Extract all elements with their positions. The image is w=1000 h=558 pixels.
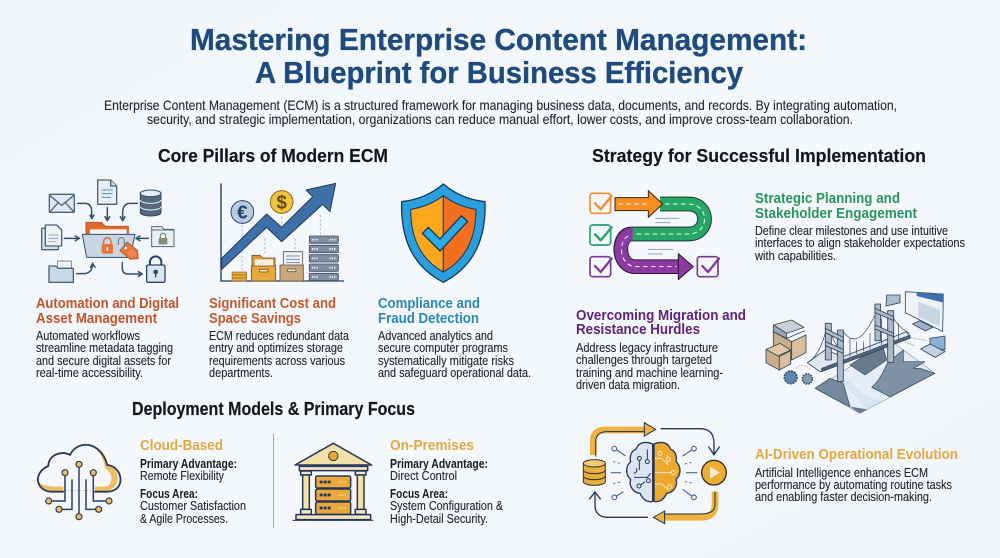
grey folder <box>152 227 174 247</box>
panel: cloud-based: Primary Advantage: <box>140 457 237 471</box>
euro coin: € <box>237 202 248 223</box>
heading and text: strategic planning: Define clear milestones and use intuitive <box>755 224 948 238</box>
heading and text: automation <box>36 295 179 380</box>
orange arrow <box>615 191 663 217</box>
intro text <box>104 98 897 127</box>
title: A Blueprint for Business Efficiency <box>255 55 744 90</box>
heading and text: AI-driven evolution: performance by automating routine tasks <box>755 478 952 492</box>
brain <box>627 442 680 502</box>
panel: cloud-based: Remote Flexibility <box>140 469 225 483</box>
heading and text: cost savings: Space Savings <box>209 310 301 327</box>
loop arrows <box>589 423 720 524</box>
document stack <box>42 225 62 250</box>
heading and text: automation: and secure digital assets for <box>36 354 171 368</box>
icon: shield <box>402 184 485 282</box>
heading and text: compliance: and safeguard operational data. <box>378 366 531 380</box>
panel: on-premises <box>390 437 504 526</box>
panel: on-premises: Focus Area: <box>390 487 448 501</box>
rising arrow <box>222 183 336 269</box>
heading and text: cost savings: entry and optimizes storage <box>209 341 343 355</box>
heading and text: strategic planning: interfaces to align stakeholder expectations <box>755 236 965 250</box>
play button <box>702 460 726 485</box>
database <box>140 190 161 216</box>
heading and text: overcoming migration: Address legacy infrastructure <box>576 341 718 355</box>
heading and text: cost savings: ECM reduces redundant data <box>209 329 349 343</box>
heading: core pillars: Core Pillars of Modern ECM <box>158 146 388 166</box>
document <box>98 180 117 204</box>
boxes <box>766 320 806 370</box>
dollar coin: $ <box>276 192 287 213</box>
heading and text: overcoming migration: training and machine learning- <box>576 366 723 380</box>
icon: roadmap <box>590 191 719 280</box>
icon: AI operational loop <box>583 423 726 524</box>
heading and text: AI-driven evolution: AI-Driven Operational Evolution <box>755 446 958 463</box>
heading and text: overcoming migration: Overcoming Migration and <box>576 307 746 324</box>
rays <box>611 450 697 496</box>
panel: on-premises: Direct Control <box>390 469 457 483</box>
heading and text: overcoming migration: challenges through targeted <box>576 353 712 367</box>
intro text: Enterprise Content Management (ECM) is a structured framework for managing business data, documents, and records. By integrating automation, <box>104 98 897 113</box>
icon: automation and digital assets <box>42 180 174 282</box>
green road <box>632 204 705 234</box>
heading and text: overcoming migration <box>576 307 746 392</box>
padlock <box>147 256 165 282</box>
gold box <box>251 255 276 281</box>
dashed guides <box>242 215 320 270</box>
heading and text: cost savings <box>209 295 349 380</box>
title <box>190 22 807 90</box>
heading and text: automation: real-time accessibility. <box>36 366 143 380</box>
heading and text: strategic planning: Strategic Planning and <box>755 190 900 207</box>
towers <box>825 304 894 382</box>
heading: strategy: Strategy for Successful Implementation <box>592 146 926 166</box>
monitor <box>886 292 943 332</box>
icon: cloud <box>38 445 121 520</box>
brain circuits <box>634 449 651 487</box>
panel: on-premises: System Configuration & <box>390 499 504 513</box>
heading and text: AI-driven evolution <box>755 446 958 504</box>
heading and text: overcoming migration: Resistance Hurdles <box>576 321 700 338</box>
heading and text: automation: Automated workflows <box>36 329 140 343</box>
heading and text: strategic planning: with capabilities. <box>754 249 836 263</box>
icon: cost savings chart <box>221 183 344 281</box>
heading and text: compliance: systematically mitigate risks <box>378 354 514 368</box>
heading and text: cost savings: departments. <box>209 366 273 380</box>
heading and text: cost savings: Significant Cost and <box>209 295 336 312</box>
small folder <box>49 261 73 282</box>
panel: cloud-based <box>140 437 246 526</box>
main folder <box>82 222 135 257</box>
heading and text: AI-driven evolution: and enabling faster decision-making. <box>755 490 932 504</box>
tan box <box>280 252 303 281</box>
heading and text: automation: streamline metadata tagging <box>36 341 173 355</box>
ground <box>815 340 935 413</box>
gears <box>784 371 812 384</box>
heading and text: AI-driven evolution: Artificial Intelligence enhances ECM <box>755 466 928 480</box>
server rack <box>309 236 338 281</box>
lock <box>102 238 113 254</box>
cables <box>809 313 909 362</box>
heading and text: cost savings: requirements across various <box>209 354 345 368</box>
heading and text: strategic planning <box>754 190 965 263</box>
panel: cloud-based: Cloud-Based <box>140 437 223 454</box>
heading and text: compliance <box>378 295 531 380</box>
envelope <box>49 194 74 212</box>
panel: cloud-based: Customer Satisfaction <box>140 499 246 513</box>
deck <box>807 332 910 372</box>
heading and text: automation: Automation and Digital <box>36 295 179 312</box>
title: Mastering Enterprise Content Management: <box>190 22 807 57</box>
tag <box>120 242 142 263</box>
icon: bridge over chasm <box>766 292 945 413</box>
panel: on-premises: On-Premises <box>390 437 474 454</box>
laptop <box>921 336 945 357</box>
heading: deployment models: Deployment Models & Primary Focus <box>132 399 415 419</box>
panel: on-premises: High-Detail Security. <box>390 512 488 526</box>
heading and text: strategic planning: Stakeholder Engagement <box>755 205 917 222</box>
heading and text: automation: Asset Management <box>36 310 157 327</box>
checkboxes <box>590 193 719 277</box>
heading and text: compliance: Advanced analytics and <box>378 329 493 343</box>
axes <box>221 183 344 281</box>
intro text: security, and strategic implementation, organizations can reduce manual effort, lower costs, and improve cross-team collaboration. <box>147 112 853 127</box>
icon: on-premises temple <box>293 443 373 520</box>
heading and text: compliance: secure computer programs <box>378 341 508 355</box>
heading and text: overcoming migration: driven data migration. <box>576 378 680 392</box>
heading and text: compliance: Compliance and <box>378 295 480 312</box>
database <box>583 460 605 485</box>
panel: cloud-based: & Agile Processes. <box>140 512 228 526</box>
purple road <box>621 234 693 280</box>
panel: cloud-based: Focus Area: <box>140 487 198 501</box>
coins <box>232 272 247 281</box>
panel: on-premises: Primary Advantage: <box>390 457 488 471</box>
heading and text: compliance: Fraud Detection <box>378 310 479 327</box>
